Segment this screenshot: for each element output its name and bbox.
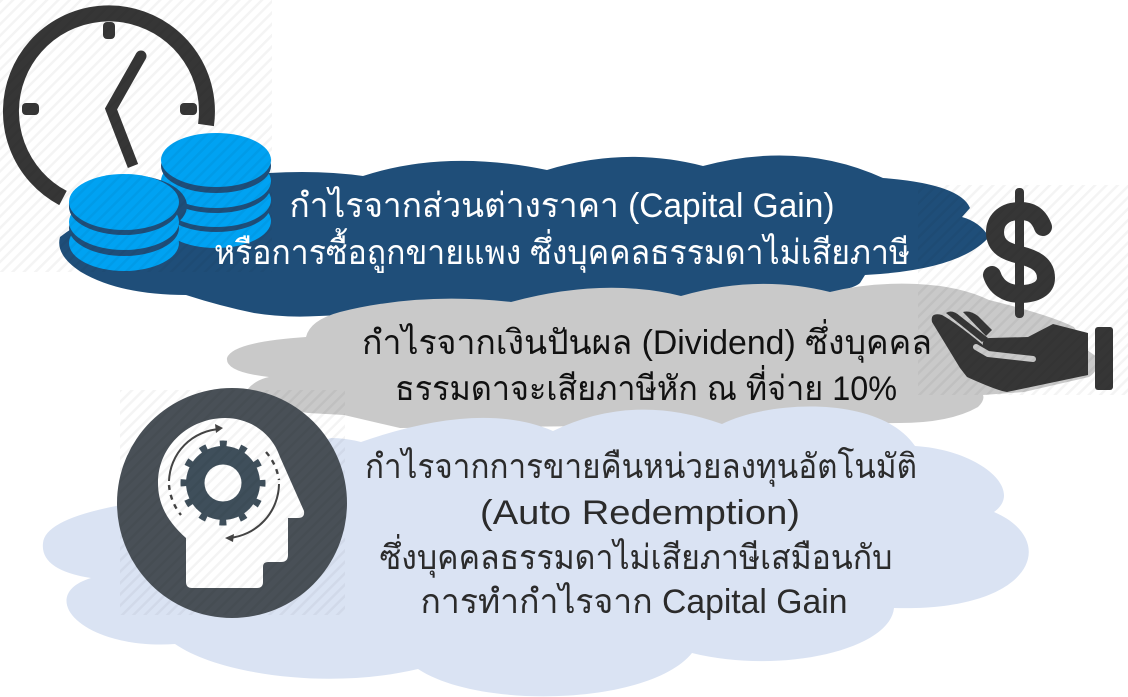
- text: auto redemption: [365, 447, 917, 621]
- text: capital gain: [214, 186, 910, 273]
- hatch overlay: clock: [0, 0, 272, 272]
- icon: head with gear: [117, 388, 347, 618]
- text: auto redemption: (Auto Redemption): [480, 494, 800, 532]
- panel: light blue cloud auto redemption: [43, 407, 1029, 696]
- text: dividend: [362, 319, 932, 408]
- icon: hand: [932, 312, 1113, 392]
- icon: clock: [11, 13, 207, 198]
- text: capital gain: กำไรจากส่วนต่างราคา (Capital Gain): [290, 186, 834, 225]
- icon: coins: [69, 133, 271, 271]
- panel: navy cloud capital gain: [59, 155, 989, 317]
- hatch overlay: dollar: [918, 185, 1128, 395]
- text: dividend: ธรรมดาจะเสียภาษีหัก ณ ที่จ่าย 10%: [395, 365, 897, 408]
- text: capital gain: หรือการซื้อถูกขายแพง ซึ่งบุคคลธรรมดาไม่เสียภาษี: [214, 228, 910, 273]
- hatch overlay: head: [120, 390, 345, 615]
- text: dividend: กำไรจากเงินปันผล (Dividend) ซึ่งบุคคล: [362, 319, 932, 363]
- icon: dollar and hand: [932, 188, 1113, 392]
- text: auto redemption: การทำกำไรจาก Capital Gain: [420, 582, 848, 621]
- text: auto redemption: ซึ่งบุคคลธรรมดาไม่เสียภาษีเสมือนกับ: [380, 534, 892, 578]
- icon: dollar sign: [992, 188, 1046, 318]
- panel: grey cloud dividend: [227, 284, 1098, 428]
- text: auto redemption: กำไรจากการขายคืนหน่วยลงทุนอัตโนมัติ: [365, 447, 917, 487]
